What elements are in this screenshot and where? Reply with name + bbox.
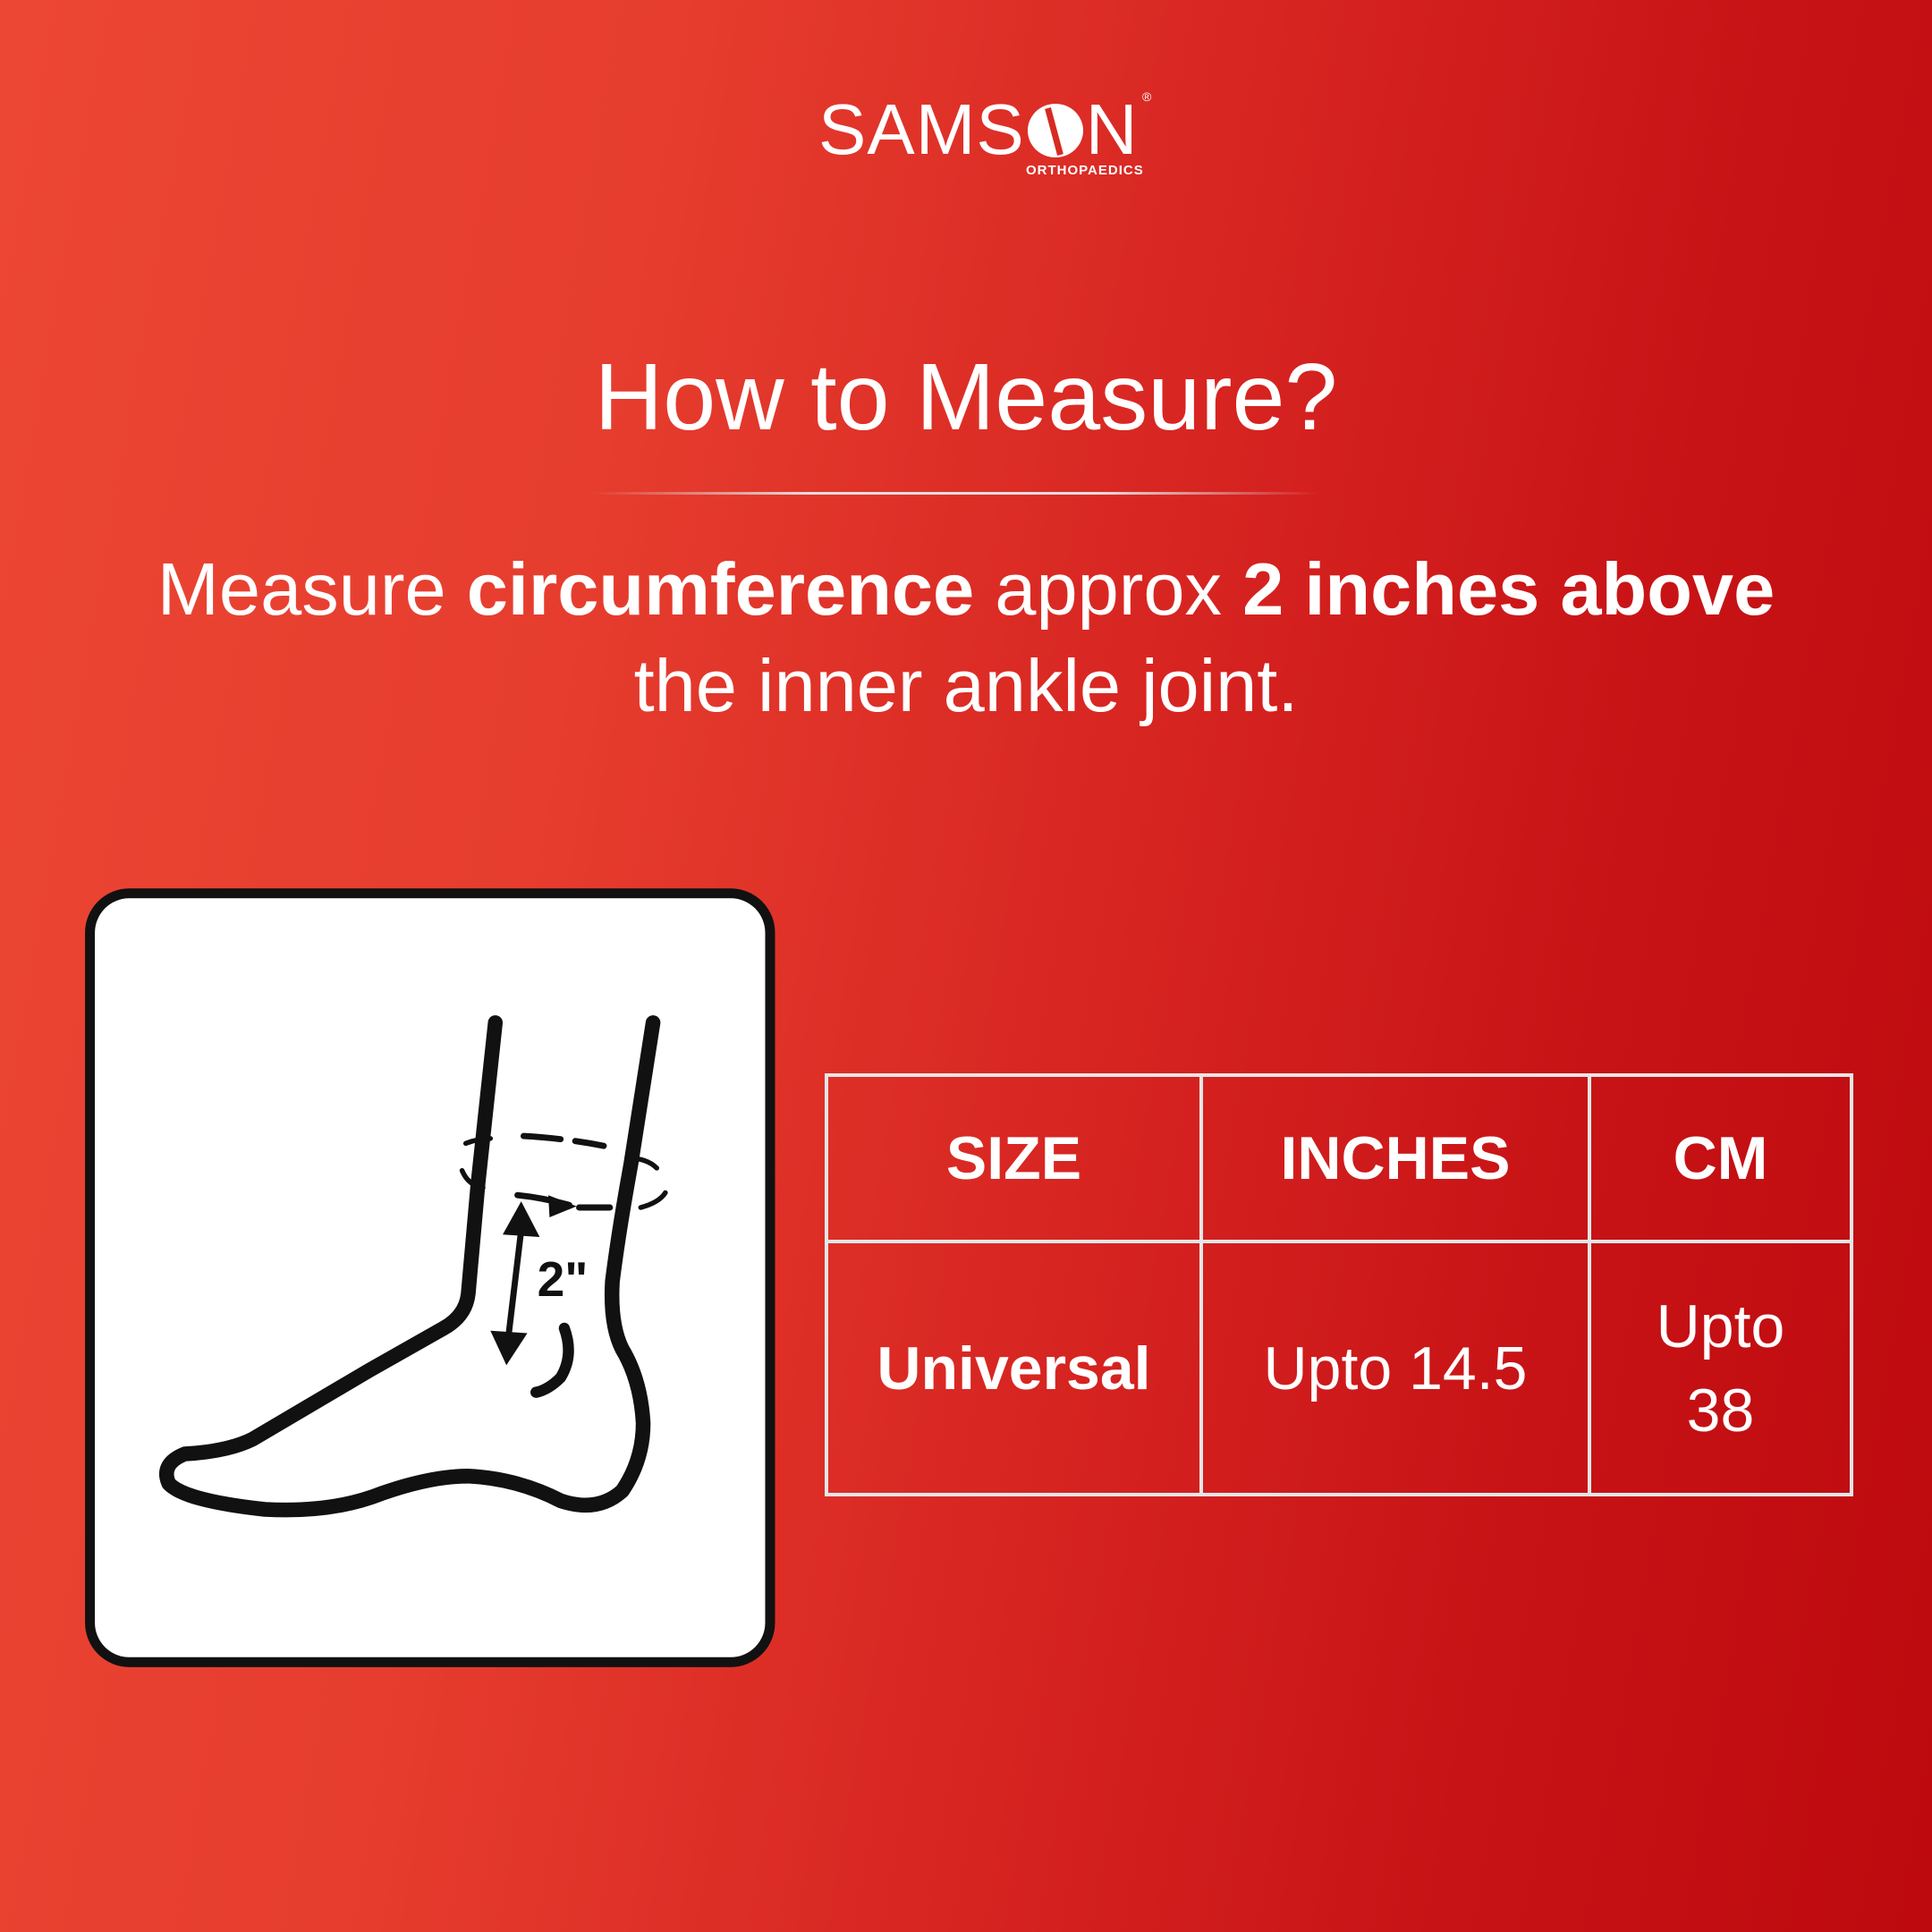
- cell: cm value: [1589, 1241, 1852, 1495]
- arrows: [490, 1195, 577, 1365]
- cell: universal: [826, 1241, 1201, 1495]
- cell: universal: Universal: [877, 1335, 1151, 1402]
- divider: [591, 492, 1318, 495]
- header: inches: [1201, 1075, 1589, 1241]
- cell: inches value: [1201, 1241, 1589, 1495]
- label: 2 inches: 2": [538, 1251, 588, 1307]
- cell: cm value: 38: [1687, 1376, 1754, 1444]
- header: inches: INCHES: [1281, 1124, 1510, 1192]
- cell: inches value: Upto 14.5: [1264, 1335, 1527, 1402]
- icon: foot: [166, 1022, 665, 1510]
- instruction text: [157, 547, 1775, 727]
- logo: ®: [1142, 89, 1151, 104]
- header: size: SIZE: [946, 1124, 1081, 1192]
- header: cm: [1589, 1075, 1852, 1241]
- instruction text: Measure circumference approx 2 inches above: [157, 547, 1775, 631]
- cell: cm value: Upto: [1657, 1292, 1784, 1360]
- logo: SAMS N: [818, 89, 1138, 169]
- logo: ORTHOPAEDICS: [1026, 163, 1144, 178]
- size table: [825, 1073, 1853, 1496]
- header: cm: CM: [1674, 1124, 1767, 1192]
- header: size: [826, 1075, 1201, 1241]
- title: How to Measure?: [595, 344, 1337, 450]
- instruction text: the inner ankle joint.: [634, 644, 1298, 727]
